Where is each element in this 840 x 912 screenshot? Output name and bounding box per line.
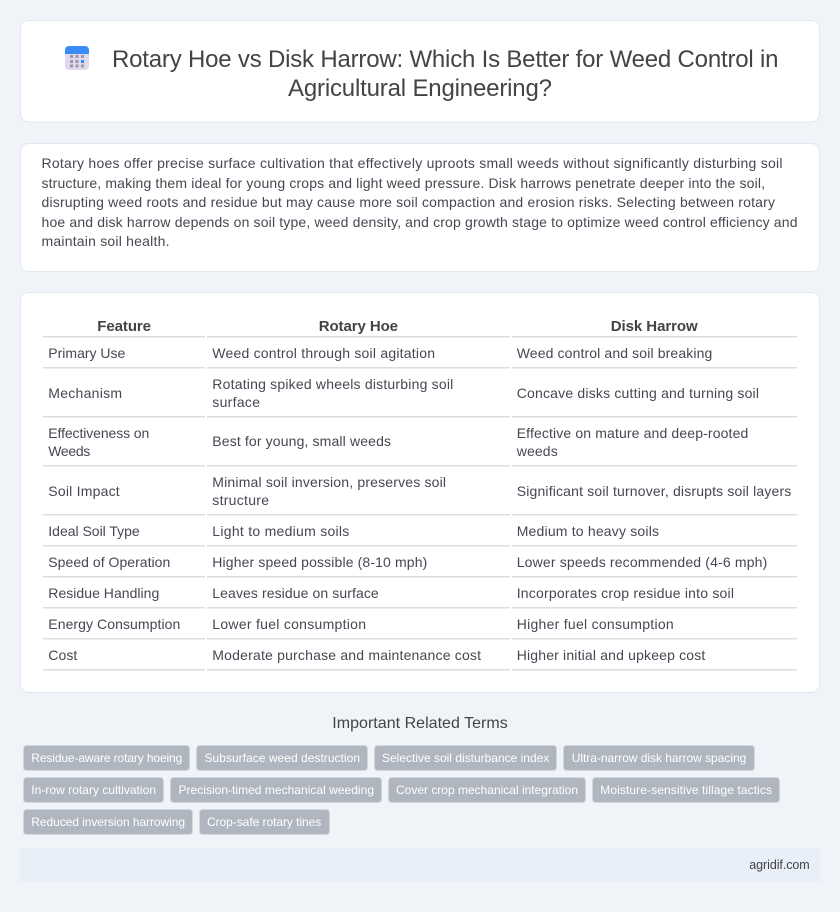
row: speed of operation (43, 554, 797, 578)
tag: Ultra-narrow disk harrow spacing (572, 751, 746, 765)
row: effectiveness on weeds: Effectiveness on (48, 425, 149, 441)
row: primary use: Weed control and soil breaking (517, 345, 712, 361)
tag: Residue-aware rotary hoeing (31, 751, 182, 765)
text block: summary paragraph: hoe and disk harrow depends on soil type, weed density, and crop growth stage to optimize weed control efficiency and (42, 214, 798, 230)
tag (388, 778, 586, 802)
table header: Disk Harrow (611, 318, 698, 335)
tag (170, 778, 382, 802)
row: ideal soil type: Light to medium soils (212, 523, 349, 539)
row: energy consumption: Lower fuel consumption (212, 616, 366, 632)
tag: Moisture-sensitive tillage tactics (600, 783, 772, 797)
title: Rotary Hoe vs Disk Harrow: Which Is Better for Weed Control in (112, 46, 778, 73)
row: residue handling: Leaves residue on surface (212, 585, 379, 601)
tag (564, 746, 754, 770)
tag (196, 746, 368, 770)
footer: agridif.com (749, 858, 810, 872)
tag: Precision-timed mechanical weeding (178, 783, 374, 797)
row: soil impact: structure (212, 492, 269, 508)
panel: related term tags (24, 746, 780, 834)
table header (43, 318, 797, 338)
row: ideal soil type: Medium to heavy soils (517, 523, 659, 539)
row: ideal soil type (43, 523, 797, 546)
text block: summary paragraph (42, 155, 798, 249)
tag: Cover crop mechanical integration (396, 783, 578, 797)
row: primary use (43, 345, 797, 368)
tag (24, 746, 190, 770)
row: primary use: Weed control through soil agitation (212, 345, 435, 361)
row: mechanism: surface (212, 394, 260, 410)
row: mechanism: Rotating spiked wheels disturbing soil (212, 376, 453, 392)
tag: Selective soil disturbance index (382, 751, 549, 765)
tag: Crop-safe rotary tines (207, 815, 321, 829)
row: energy consumption: Higher fuel consumption (517, 616, 674, 632)
panel: title card (20, 20, 820, 122)
row: energy consumption: Energy Consumption (48, 616, 180, 632)
table header: Feature (97, 318, 151, 335)
row: effectiveness on weeds: Best for young, small weeds (212, 433, 391, 449)
row: speed of operation: Higher speed possible (8-10 mph) (212, 554, 427, 570)
row: residue handling: Incorporates crop residue into soil (517, 585, 734, 601)
row: effectiveness on weeds: weeds (516, 443, 558, 459)
footer (20, 848, 820, 882)
text block: summary paragraph: maintain soil health. (42, 233, 170, 249)
row: effectiveness on weeds (43, 425, 797, 466)
row: mechanism: Concave disks cutting and turning soil (517, 385, 759, 401)
row: cost: Cost (48, 647, 77, 663)
tag (24, 810, 192, 834)
tag (374, 746, 556, 770)
text block: summary paragraph: Rotary hoes offer precise surface cultivation that effectively uproots small weeds without significantly disturbing soil (42, 155, 782, 171)
tag: In-row rotary cultivation (31, 783, 156, 797)
table header: Rotary Hoe (319, 318, 398, 335)
title: Agricultural Engineering? (288, 75, 552, 102)
text block: summary paragraph: disrupting weed roots and residue but may cause more soil compaction and erosion risks. Selecting between rotary (42, 194, 775, 210)
row: speed of operation: Lower speeds recommended (4-6 mph) (517, 554, 767, 570)
row: soil impact: Significant soil turnover, disrupts soil layers (517, 483, 791, 499)
row: soil impact: Minimal soil inversion, preserves soil (212, 474, 446, 490)
row: cost: Moderate purchase and maintenance cost (212, 647, 481, 663)
row: effectiveness on weeds: Effective on mature and deep-rooted (517, 425, 748, 441)
icon: calendar (65, 46, 89, 70)
row: ideal soil type: Ideal Soil Type (48, 523, 140, 539)
row: soil impact (43, 474, 797, 516)
panel: comparison table (20, 292, 820, 692)
title (112, 46, 778, 102)
panel: summary (20, 144, 820, 272)
row: primary use: Primary Use (48, 345, 126, 361)
row: mechanism (43, 376, 797, 418)
row: cost (43, 647, 797, 670)
row: soil impact: Soil Impact (48, 483, 120, 499)
row: effectiveness on weeds: Weeds (48, 443, 90, 459)
tag: Reduced inversion harrowing (31, 815, 185, 829)
tag (24, 778, 164, 802)
tag (592, 778, 780, 802)
row: residue handling: Residue Handling (48, 585, 159, 601)
row: energy consumption (43, 616, 797, 640)
tag: Subsurface weed destruction (204, 751, 360, 765)
row: speed of operation: Speed of Operation (48, 554, 170, 570)
tag (200, 810, 330, 834)
text block: summary paragraph: structure, making them ideal for young crops and light weed pressure. Disk harrows penetrate deeper into the soil, (42, 175, 765, 191)
row: cost: Higher initial and upkeep cost (517, 647, 705, 663)
heading: important related terms: Important Related Terms (332, 715, 508, 732)
row: residue handling (43, 585, 797, 608)
row: mechanism: Mechanism (48, 385, 122, 401)
